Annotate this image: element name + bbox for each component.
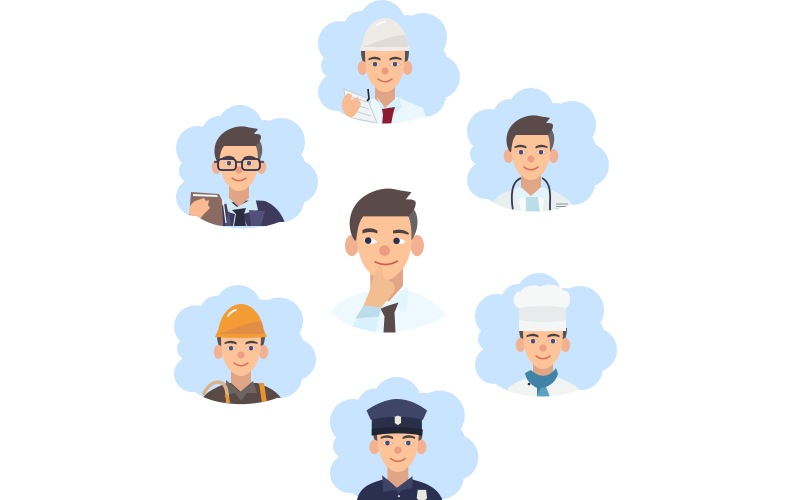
sleeve (352, 306, 382, 332)
central thinking man (330, 189, 446, 332)
hand with finger on chin (364, 266, 395, 308)
panel: engineer in white hard hat (318, 0, 460, 127)
panel: doctor (467, 88, 609, 215)
businessman figure (189, 126, 286, 226)
panel: police officer (330, 377, 478, 500)
collar (364, 286, 408, 314)
cloud background (467, 88, 609, 212)
cloud background (330, 377, 478, 500)
cloud background (318, 0, 460, 124)
tie (380, 302, 398, 332)
panel: chef (475, 273, 617, 404)
cloud background (176, 105, 318, 228)
doctor figure (489, 115, 575, 215)
engineer figure (342, 18, 429, 127)
panel: construction worker (174, 285, 316, 411)
cloud background (475, 273, 617, 396)
head (345, 189, 424, 302)
chef figure (506, 284, 580, 396)
construction worker figure (202, 304, 281, 404)
panel: businessman with glasses (176, 105, 318, 228)
shirt (330, 290, 446, 332)
cloud background (174, 285, 316, 404)
police officer figure (354, 399, 444, 500)
